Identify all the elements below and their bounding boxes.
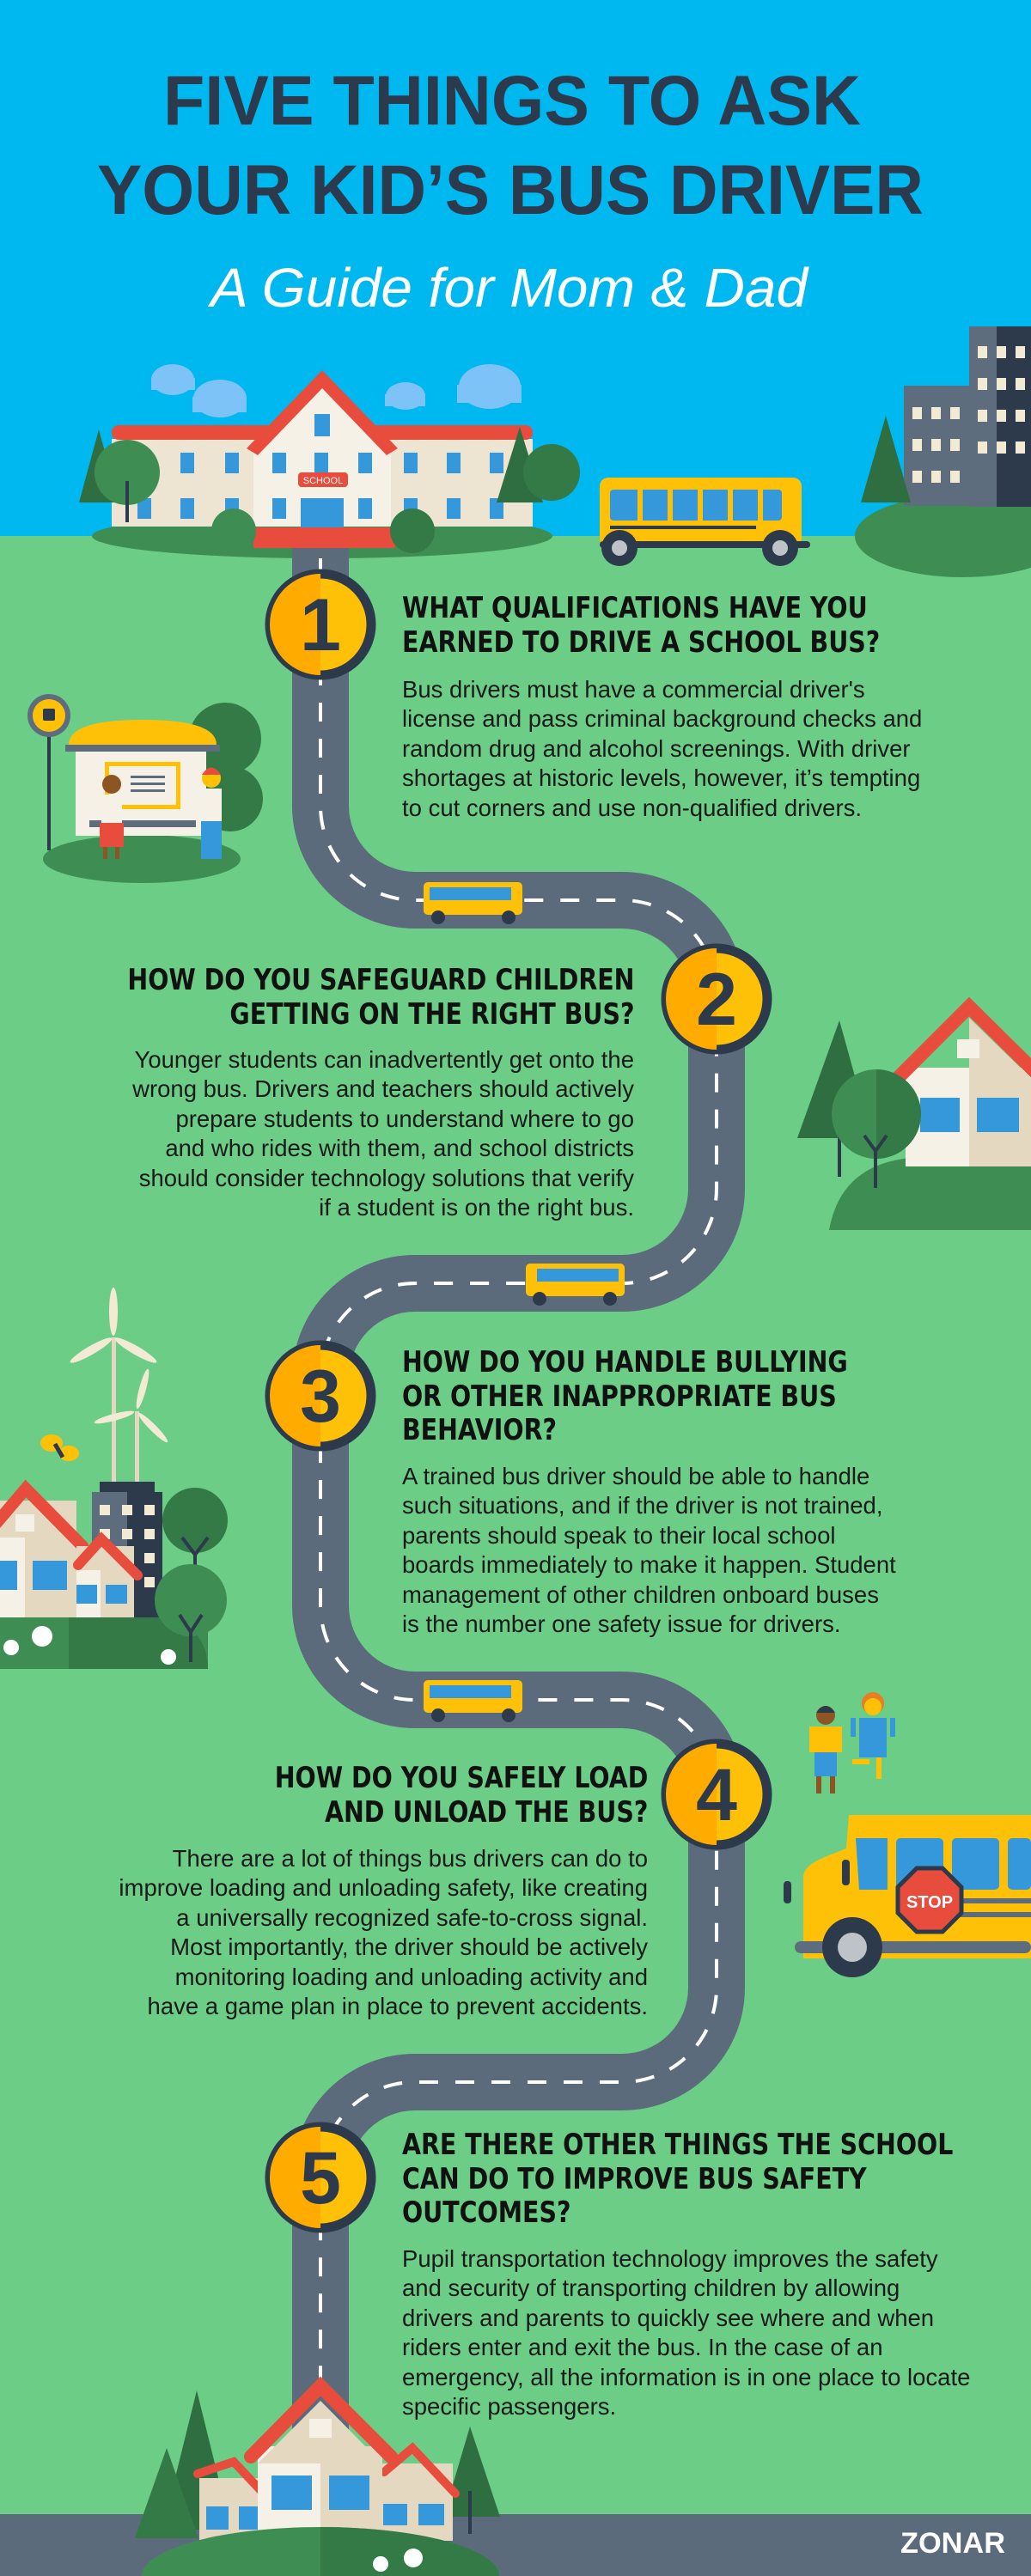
windmill town scene — [0, 1288, 228, 1669]
kids and stop bus scene: STOP — [906, 1893, 953, 1912]
title: YOUR KID’S BUS DRIVER — [97, 151, 924, 229]
question 1 body: shortages at historic levels, however, it’s tempting — [402, 764, 920, 791]
question 4 heading: HOW DO YOU SAFELY LOAD — [274, 1761, 648, 1795]
question 3 body: A trained bus driver should be able to handle — [402, 1463, 869, 1489]
question 2 body: Younger students can inadvertently get onto the — [134, 1046, 634, 1073]
question 4 body: There are a lot of things bus drivers can do to — [173, 1845, 648, 1872]
question 3 body: is the number one safety issue for drivers. — [402, 1611, 841, 1637]
question 4 heading: AND UNLOAD THE BUS? — [325, 1795, 648, 1830]
question 5 body — [402, 2245, 970, 2420]
question 4 body: a universally recognized safe-to-cross signal. — [176, 1904, 648, 1931]
number circles: 5 — [300, 2137, 341, 2220]
small bus 3 — [424, 1680, 522, 1722]
question 3 heading — [402, 1345, 848, 1447]
question 5 body: drivers and parents to quickly see where and when — [402, 2305, 934, 2331]
number circles: 1 — [300, 584, 341, 667]
question 4 body — [119, 1845, 648, 2019]
question 3 body: management of other children onboard buses — [402, 1581, 879, 1608]
school building: SCHOOL — [303, 476, 343, 486]
question 1 body: Bus drivers must have a commercial driver's — [402, 676, 865, 703]
question 3 body — [402, 1463, 896, 1637]
question 2 body: prepare students to understand where to go — [175, 1105, 634, 1132]
question 4 body: Most importantly, the driver should be actively — [170, 1934, 648, 1960]
question 5 body: emergency, all the information is in one place to locate — [402, 2364, 970, 2390]
road — [320, 548, 717, 2525]
question 5 body: and security of transporting children by allowing — [402, 2275, 900, 2301]
house scene right of Q2 — [797, 1007, 1031, 1230]
question 1 heading: WHAT QUALIFICATIONS HAVE YOU — [402, 591, 868, 625]
question 4 body: improve loading and unloading safety, like creating — [119, 1874, 648, 1901]
question 3 heading: HOW DO YOU HANDLE BULLYING — [402, 1345, 848, 1379]
zonar logo: ZONAR — [900, 2527, 1005, 2560]
school building — [79, 370, 580, 558]
question 3 body: such situations, and if the driver is not trained, — [402, 1492, 882, 1519]
question 1 body: to cut corners and use non-qualified drivers. — [402, 795, 862, 821]
kids and stop bus scene — [784, 1692, 1031, 1977]
title: FIVE THINGS TO ASK — [163, 62, 861, 140]
question 2 heading: HOW DO YOU SAFEGUARD CHILDREN — [127, 963, 634, 997]
question 5 body: Pupil transportation technology improves the safety — [402, 2245, 938, 2272]
small bus 2 — [526, 1264, 625, 1306]
question 2 body: and who rides with them, and school districts — [165, 1135, 634, 1161]
question 5 heading: ARE THERE OTHER THINGS THE SCHOOL — [402, 2128, 953, 2162]
question 4 body: monitoring loading and unloading activity and — [175, 1964, 648, 1990]
big school bus top — [600, 478, 810, 566]
bottom houses scene — [135, 2386, 500, 2576]
bus stop scene — [27, 694, 263, 883]
question 2 body — [132, 1046, 634, 1221]
question 3 body: parents should speak to their local school — [402, 1522, 835, 1549]
question 4 body: have a game plan in place to prevent accidents. — [148, 1993, 648, 2019]
question 5 body: specific passengers. — [402, 2393, 616, 2420]
number circles: 3 — [300, 1355, 341, 1438]
question 1 body: license and pass criminal background checks and — [402, 705, 922, 732]
question 2 heading — [127, 963, 634, 1031]
question 3 heading: OR OTHER INAPPROPRIATE BUS — [402, 1379, 837, 1414]
question 1 body — [402, 676, 922, 821]
question 3 body: boards immediately to make it happen. Student — [402, 1551, 896, 1578]
question 5 heading — [402, 2128, 953, 2230]
clouds — [151, 364, 522, 417]
question 1 heading: EARNED TO DRIVE A SCHOOL BUS? — [402, 625, 880, 660]
question 1 body: random drug and alcohol screenings. With driver — [402, 735, 911, 762]
question 2 body: wrong bus. Drivers and teachers should actively — [132, 1075, 634, 1102]
title — [97, 62, 924, 229]
question 2 body: should consider technology solutions that verify — [139, 1165, 634, 1191]
number circles: 2 — [696, 959, 737, 1041]
question 5 heading: CAN DO TO IMPROVE BUS SAFETY — [402, 2161, 867, 2195]
question 5 heading: OUTCOMES? — [402, 2195, 570, 2230]
number circles — [270, 574, 767, 2228]
question 5 body: riders enter and exit the bus. In the case of an — [402, 2334, 883, 2360]
question 3 heading: BEHAVIOR? — [402, 1413, 557, 1447]
question 2 heading: GETTING ON THE RIGHT BUS? — [229, 996, 634, 1031]
small bus 1 — [424, 882, 522, 924]
question 2 body: if a student is on the right bus. — [319, 1194, 634, 1221]
question 4 heading — [274, 1761, 648, 1830]
bottom grey strip — [0, 2514, 1031, 2576]
question 1 heading — [402, 591, 880, 660]
sky — [0, 0, 1031, 536]
city buildings — [855, 326, 1031, 577]
subtitle: A Guide for Mom & Dad — [207, 257, 809, 319]
number circles: 4 — [696, 1754, 737, 1836]
